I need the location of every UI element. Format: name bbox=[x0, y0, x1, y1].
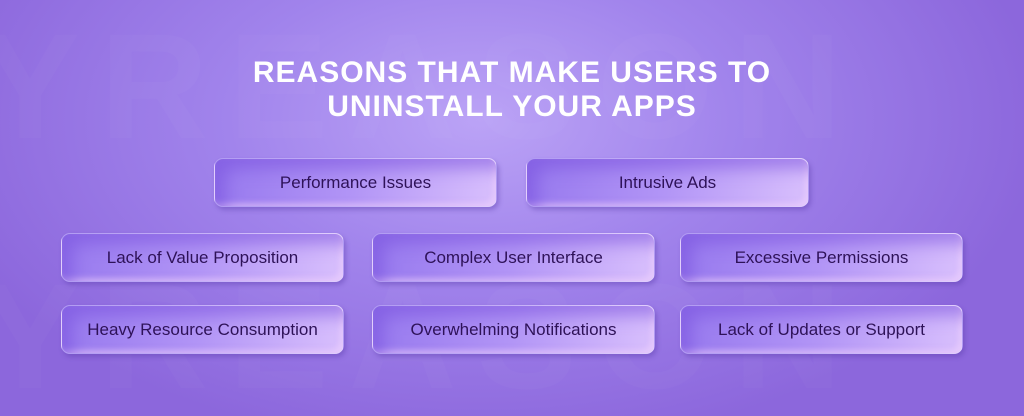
button: Performance Issues bbox=[214, 158, 497, 207]
button: Excessive Permissions: Excessive Permissions bbox=[735, 248, 908, 266]
button: Heavy Resource Consumption: Heavy Resource Consumption bbox=[87, 320, 318, 338]
text: YREASON bbox=[0, 2, 862, 170]
button: Overwhelming Notifications: Overwhelming Notifications bbox=[411, 320, 616, 338]
title: UNINSTALL YOUR APPS bbox=[327, 90, 697, 123]
button: Lack of Value Proposition bbox=[61, 233, 344, 282]
title bbox=[253, 56, 771, 123]
button: Lack of Value Proposition: Lack of Value Proposition bbox=[107, 248, 298, 266]
button: Overwhelming Notifications bbox=[372, 305, 655, 354]
button: Intrusive Ads: Intrusive Ads bbox=[619, 172, 716, 192]
button: Lack of Updates or Support bbox=[680, 305, 963, 354]
button: Complex User Interface bbox=[372, 233, 655, 282]
button: Intrusive Ads bbox=[526, 158, 809, 207]
button: Excessive Permissions bbox=[680, 233, 963, 282]
button: Complex User Interface: Complex User Interface bbox=[424, 248, 603, 266]
button: Performance Issues: Performance Issues bbox=[280, 172, 431, 192]
button: Heavy Resource Consumption bbox=[61, 305, 344, 354]
title: REASONS THAT MAKE USERS TO bbox=[253, 56, 771, 89]
button: Lack of Updates or Support: Lack of Updates or Support bbox=[718, 320, 925, 338]
